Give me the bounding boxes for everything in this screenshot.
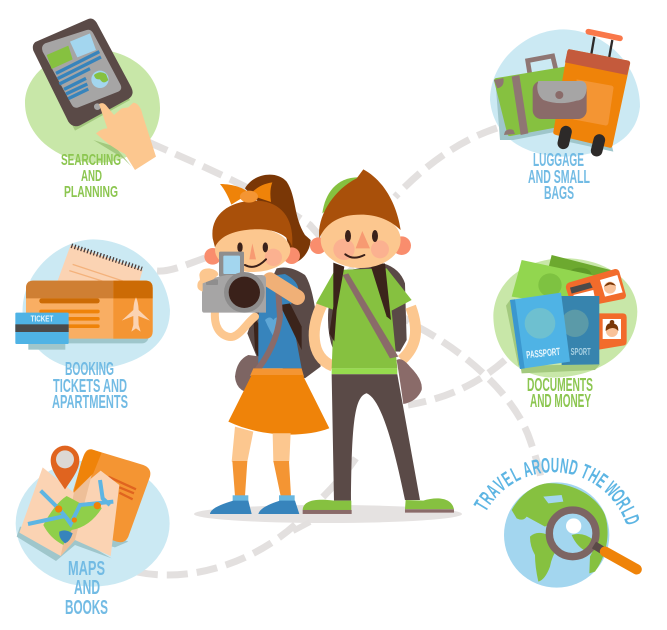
dash over shadow (293, 522, 310, 531)
panel: documents and money (493, 255, 637, 411)
label: documents and money: DOCUMENTS (527, 375, 593, 395)
icon: tickets on blue blob: TICKET (31, 314, 54, 324)
icon: map, pin and book on blue blob (16, 446, 170, 587)
icon: passports, money and IDs on green blob (493, 255, 637, 378)
icon: suitcases on blue blob (490, 29, 640, 157)
label: searching and planning: AND (81, 168, 102, 185)
icon: passports, money and IDs on green blob: PASSPORT (526, 347, 561, 361)
label: booking tickets and apartments: TICKETS AND (53, 376, 127, 396)
character: girl with camera (197, 175, 329, 514)
dashed route lines (137, 128, 543, 575)
curved heading: travel around the world: R (530, 455, 543, 480)
curved heading: travel around the world: N (559, 454, 570, 478)
label: documents and money (527, 375, 593, 411)
curved heading: travel around the world: V (489, 473, 511, 496)
curved heading: travel around the world: U (551, 454, 559, 477)
curved heading: travel around the world: D (567, 455, 580, 480)
label: maps and books (65, 558, 108, 619)
curved heading: travel around the world: T (470, 496, 494, 515)
label: maps and books: AND (74, 577, 100, 599)
curved heading: travel around the world: T (578, 460, 594, 484)
curved heading: travel around the world: W (600, 477, 624, 501)
icon: globe with magnifier (504, 482, 637, 588)
ground shadow (194, 505, 462, 523)
curved heading: travel around the world: R (611, 493, 636, 513)
icon: passports, money and IDs on green blob: SPORT (571, 347, 591, 358)
curved heading: travel around the world: L (507, 462, 524, 487)
panel: searching and planning (25, 19, 160, 201)
label: luggage and small bags: AND SMALL (528, 167, 590, 187)
blob: green background (25, 50, 160, 163)
curved heading: travel around the world: R (475, 488, 499, 509)
curved heading: travel around the world: O (540, 454, 551, 478)
panel: luggage and small bags (490, 29, 640, 203)
label: luggage and small bags: BAGS (544, 183, 574, 203)
panel: booking tickets and apartments (15, 239, 170, 412)
curved heading: travel around the world: A (482, 480, 504, 502)
label: documents and money: AND MONEY (530, 391, 591, 411)
curved heading: travel around the world: D (619, 512, 644, 528)
icon: tablet and hand (33, 19, 156, 170)
curved heading: travel around the world: E (592, 469, 612, 493)
curved heading: travel around the world (470, 454, 644, 528)
label: maps and books: BOOKS (65, 597, 108, 619)
label: booking tickets and apartments (52, 359, 128, 412)
curved heading: travel around the world: E (498, 467, 517, 491)
icon: tickets on blue blob (15, 239, 170, 370)
label: searching and planning: PLANNING (64, 184, 118, 201)
label: luggage and small bags (528, 150, 590, 203)
character: boy with backpack (303, 169, 454, 514)
label: booking tickets and apartments: BOOKING (65, 359, 114, 379)
panel: maps and books (16, 446, 170, 619)
label: maps and books: MAPS (68, 558, 105, 580)
label: searching and planning (61, 152, 121, 201)
curved heading: travel around the world: O (606, 485, 630, 507)
label: searching and planning: SEARCHING (61, 152, 121, 169)
curved heading: travel around the world: H (585, 464, 603, 488)
panel: travel around the world (470, 454, 644, 588)
curved heading: travel around the world: A (520, 457, 535, 482)
label: luggage and small bags: LUGGAGE (533, 150, 584, 170)
curved heading: travel around the world: L (616, 503, 640, 520)
label: booking tickets and apartments: APARTMENTS (52, 392, 128, 412)
